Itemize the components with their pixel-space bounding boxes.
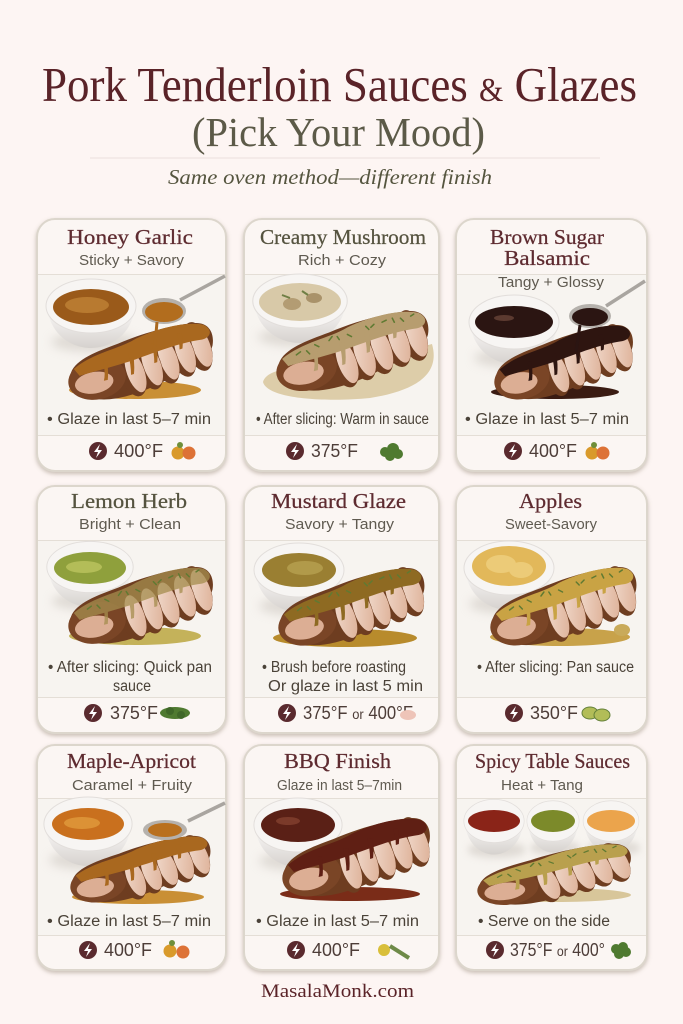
panel: Lemon Herb	[37, 486, 226, 733]
bowl of sauce	[464, 541, 557, 614]
bowl of sauce	[47, 541, 136, 611]
descriptor: Tangy + Glossy	[498, 275, 605, 291]
icon: broccoli	[611, 942, 631, 959]
descriptor: Savory + Tangy	[285, 517, 395, 533]
panel: Creamy Mushroom	[244, 219, 439, 471]
panel: Maple-Apricot	[37, 745, 226, 970]
descriptor: Sticky + Savory	[79, 253, 185, 269]
bowl: green sauce	[527, 801, 581, 856]
icon: cucumber	[582, 707, 610, 721]
heading: Apples	[519, 489, 582, 513]
icon: fruit	[586, 442, 610, 460]
icon: lemon and herbs	[378, 944, 409, 958]
oven temperature: 400°F	[114, 441, 163, 461]
bowl of sauce	[254, 798, 345, 871]
panel: BBQ Finish	[244, 745, 439, 970]
icon: fruit	[172, 442, 196, 460]
bowl of sauce	[469, 295, 562, 368]
tip: • Glaze in last 5–7 min	[465, 411, 629, 428]
bowl of sauce	[253, 274, 350, 347]
panel: Brown Sugar Balsamic: Balsamic	[504, 246, 590, 270]
pork in cream sauce	[263, 306, 434, 400]
bowl of sauce	[254, 543, 347, 616]
pork with herbs	[64, 562, 218, 649]
glazed pork	[64, 318, 218, 405]
title: Pork Tenderloin Sauces & Glazes	[42, 57, 637, 112]
footer brand: MasalaMonk.com	[261, 981, 414, 1002]
spoon	[569, 281, 645, 352]
tip: • Brush before roasting	[262, 659, 406, 676]
pork with apples	[486, 562, 642, 651]
panel: Mustard Glaze	[244, 486, 439, 733]
spoon	[142, 276, 225, 345]
oven temperature	[84, 703, 158, 723]
oven temperature: 375°F or 400°F	[303, 703, 413, 723]
heading: Spicy Table Sauces	[475, 749, 630, 773]
oven temperature	[286, 441, 358, 461]
heading: Mustard Glaze	[271, 489, 406, 513]
descriptor: Heat + Tang	[501, 778, 583, 794]
oven temperature: 375°F	[110, 703, 158, 723]
glazed pork	[273, 563, 430, 651]
tip	[262, 659, 423, 695]
panel: Lemon Herb: sauce	[113, 678, 151, 695]
oven temperature: 350°F	[530, 703, 578, 723]
oven temperature	[504, 441, 577, 461]
tagline: Same oven method—different finish	[168, 165, 492, 189]
heading: Brown Sugar	[490, 225, 604, 249]
panel: Apples	[456, 486, 647, 733]
tip: • Serve on the side	[478, 913, 610, 930]
bowl: orange sauce	[583, 801, 641, 856]
panel: Brown Sugar Balsamic	[456, 219, 647, 471]
spoon	[143, 803, 225, 840]
heading: Creamy Mushroom	[260, 225, 426, 249]
heading: Lemon Herb	[71, 489, 187, 513]
pork with toppings	[473, 840, 637, 909]
heading: Honey Garlic	[67, 225, 193, 249]
tip: Or glaze in last 5 min	[268, 678, 423, 695]
glazed pork	[67, 832, 216, 907]
glazed pork	[491, 320, 638, 405]
panel: Spicy Table Sauces	[456, 745, 647, 970]
icon: fruit	[164, 940, 190, 958]
tip: • Glaze in last 5–7 min	[256, 913, 419, 930]
glazed pork	[278, 813, 436, 902]
tip: • After slicing: Pan sauce	[477, 659, 634, 676]
bowl of sauce	[46, 279, 139, 352]
heading: BBQ Finish	[284, 749, 391, 773]
tip: • After slicing: Quick pan	[48, 659, 212, 676]
panel: Honey Garlic	[37, 219, 226, 471]
oven temperature: 400°F	[529, 441, 577, 461]
descriptor: Sweet-Savory	[505, 517, 598, 533]
oven temperature: 375°F or 400°	[510, 940, 605, 960]
subtitle: (Pick Your Mood)	[192, 109, 485, 155]
descriptor: Caramel + Fruity	[72, 778, 193, 794]
oven temperature	[79, 940, 152, 960]
icon: herbs	[160, 707, 190, 719]
descriptor: Bright + Clean	[79, 517, 181, 533]
oven temperature	[505, 703, 578, 723]
tip: • Glaze in last 5–7 min	[47, 411, 211, 428]
bowl: red sauce	[464, 799, 526, 858]
oven temperature: 375°F	[311, 441, 358, 461]
oven temperature: 400°F	[312, 940, 360, 960]
icon: herbs	[380, 443, 403, 461]
tip: • After slicing: Warm in sauce	[256, 411, 429, 428]
heading: Maple-Apricot	[67, 749, 196, 773]
descriptor: Rich + Cozy	[298, 253, 387, 269]
oven temperature	[89, 441, 163, 461]
icon: garlic	[400, 710, 416, 720]
descriptor: Glaze in last 5–7min	[277, 778, 402, 794]
tip: • Glaze in last 5–7 min	[47, 913, 211, 930]
oven temperature: 400°F	[104, 940, 152, 960]
oven temperature	[287, 940, 360, 960]
bowl of sauce	[44, 797, 135, 870]
